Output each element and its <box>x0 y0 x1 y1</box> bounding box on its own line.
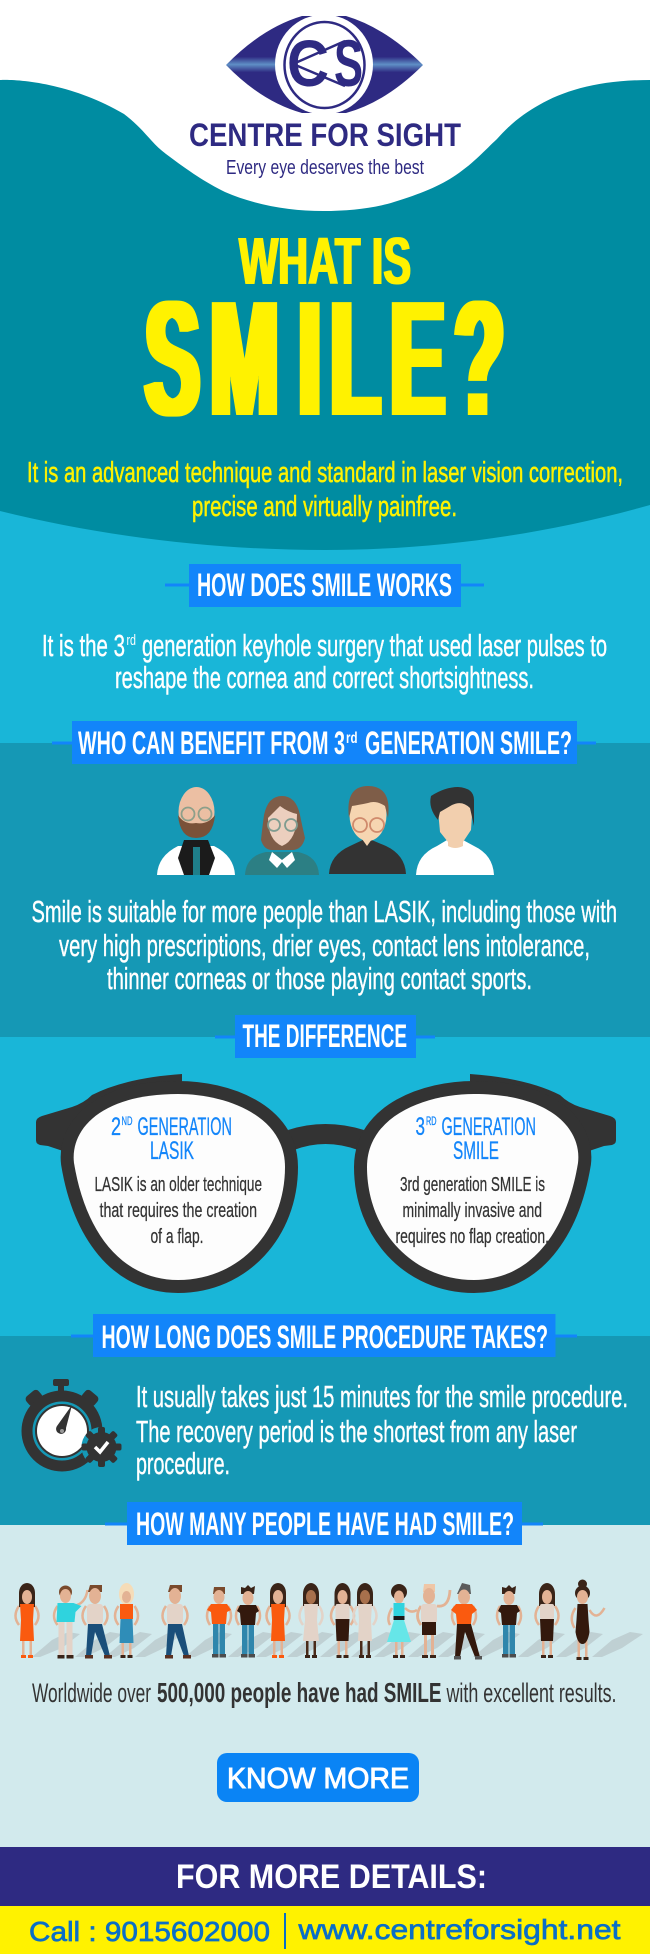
footer: contact strip <box>0 1906 650 1954</box>
text: how it works: rd <box>126 632 136 649</box>
logo letter C: C <box>287 26 329 100</box>
text: worldwide statistic: Worldwide over <box>32 1678 151 1708</box>
person: bald doctor <box>157 787 235 875</box>
footer: for more details: FOR MORE DETAILS: <box>176 1858 487 1896</box>
website: www.centreforsight.net <box>297 1914 621 1945</box>
figure shadows <box>32 1632 643 1657</box>
icon: eye iris ring <box>275 14 373 114</box>
left lens heading: GENERATION <box>138 1113 232 1141</box>
text: how it works: It is the 3 <box>42 629 125 663</box>
left lens heading: ND <box>122 1114 133 1128</box>
figure 10: woman in dark skirt <box>331 1583 354 1658</box>
intro line 2: precise and virtually painfree. <box>192 491 457 523</box>
background: white page top <box>0 0 650 260</box>
person: man with white shirt <box>416 787 494 875</box>
right lens heading: GENERATION <box>442 1113 536 1141</box>
logo letter S: S <box>334 26 363 100</box>
background: teal hero panel <box>0 80 650 560</box>
right lens heading <box>416 1113 536 1165</box>
left lens heading <box>111 1113 232 1165</box>
panel: the difference band <box>0 1037 650 1336</box>
text: how it works <box>42 629 607 695</box>
text: worldwide statistic: 500,000 people have had SMILE <box>157 1677 442 1708</box>
logo tagline: Every eye deserves the best <box>226 157 424 179</box>
left lens body text: that requires the creation <box>100 1199 257 1222</box>
right lens heading: 3 <box>416 1113 425 1141</box>
figure 5: man in navy jeans <box>162 1585 191 1658</box>
figure 11: woman in beige dress <box>354 1583 376 1658</box>
left lens and frame <box>36 1074 285 1280</box>
glasses illustration <box>36 1074 616 1280</box>
right lens heading: SMILE <box>453 1137 499 1165</box>
right lens body text: minimally invasive and <box>402 1199 542 1222</box>
right lens body text: requires no flap creation. <box>396 1225 549 1248</box>
figure 13: blond man waving <box>418 1584 450 1658</box>
heading: how many people <box>105 1502 543 1545</box>
button: know more: KNOW MORE <box>227 1763 409 1795</box>
heading: who can benefit: WHO CAN BENEFIT FROM 3 <box>78 725 345 761</box>
intro text <box>27 457 623 523</box>
logo: Centre for Sight <box>189 14 461 179</box>
icon: eye <box>226 16 423 113</box>
figure 9: woman in beige dress <box>300 1583 322 1658</box>
figure 2: man in cyan shirt <box>54 1586 88 1658</box>
figure 1: woman in orange dress <box>16 1583 38 1658</box>
figure 3: man in navy jeans <box>82 1585 112 1658</box>
panel: how long band <box>0 1336 650 1525</box>
text: how long <box>136 1380 628 1481</box>
heading: the difference: THE DIFFERENCE <box>242 1018 407 1054</box>
heading: who can benefit <box>52 721 596 764</box>
left lens body text <box>94 1173 262 1248</box>
person: man with orange glasses <box>329 786 406 874</box>
heading: how does smile works <box>165 564 484 607</box>
figure 17: woman in black dress waving <box>572 1580 604 1660</box>
left lens heading: 2 <box>111 1113 121 1141</box>
phone number: Call : 9015602000 <box>29 1916 270 1947</box>
panel: how many people band <box>0 1525 650 1847</box>
text: how long: procedure. <box>136 1447 230 1481</box>
illustration: row of people with shadows <box>16 1580 643 1660</box>
footer: for more details <box>0 1847 650 1906</box>
heading: how does smile works: HOW DOES SMILE WORKS <box>197 567 452 603</box>
figure 16: woman in dark skirt <box>536 1583 558 1658</box>
right lens body text <box>396 1173 549 1248</box>
figure 14: gray-hair man in orange <box>451 1583 482 1660</box>
logo name: CENTRE FOR SIGHT <box>189 117 461 153</box>
figure 8: woman in orange dress <box>266 1583 290 1658</box>
right lens and frame <box>367 1074 616 1280</box>
text: who can benefit <box>32 895 617 996</box>
figure 7: man in black shirt <box>236 1585 260 1658</box>
title: what is: WHAT IS <box>239 224 411 299</box>
figure 6: man in orange shirt <box>207 1587 231 1658</box>
figure 4: blonde woman <box>115 1583 138 1658</box>
person: woman with glasses <box>245 796 319 875</box>
heading: who can benefit: rd <box>346 730 358 747</box>
panel: light blue section with how it works <box>0 505 650 745</box>
right lens body text: 3rd generation SMILE is <box>400 1173 545 1196</box>
icon: iris outline <box>284 22 364 108</box>
button: know more <box>217 1753 419 1802</box>
logo laser lines <box>293 41 345 86</box>
figure 15: man in black shirt <box>497 1585 521 1658</box>
figure 12: girl in cyan dress <box>387 1584 417 1658</box>
title: SMILE?: SMILE? <box>145 268 504 450</box>
glasses bridge <box>288 1124 364 1150</box>
icon: stopwatch with gear <box>24 1379 121 1467</box>
right lens heading: RD <box>426 1114 437 1128</box>
panel: who can benefit band <box>0 743 650 1037</box>
left lens body text: of a flap. <box>150 1225 204 1248</box>
left lens body text: LASIK is an older technique <box>94 1173 262 1196</box>
icon group: four people <box>157 786 494 875</box>
left lens heading: LASIK <box>150 1137 194 1165</box>
heading: the difference <box>215 1015 435 1058</box>
